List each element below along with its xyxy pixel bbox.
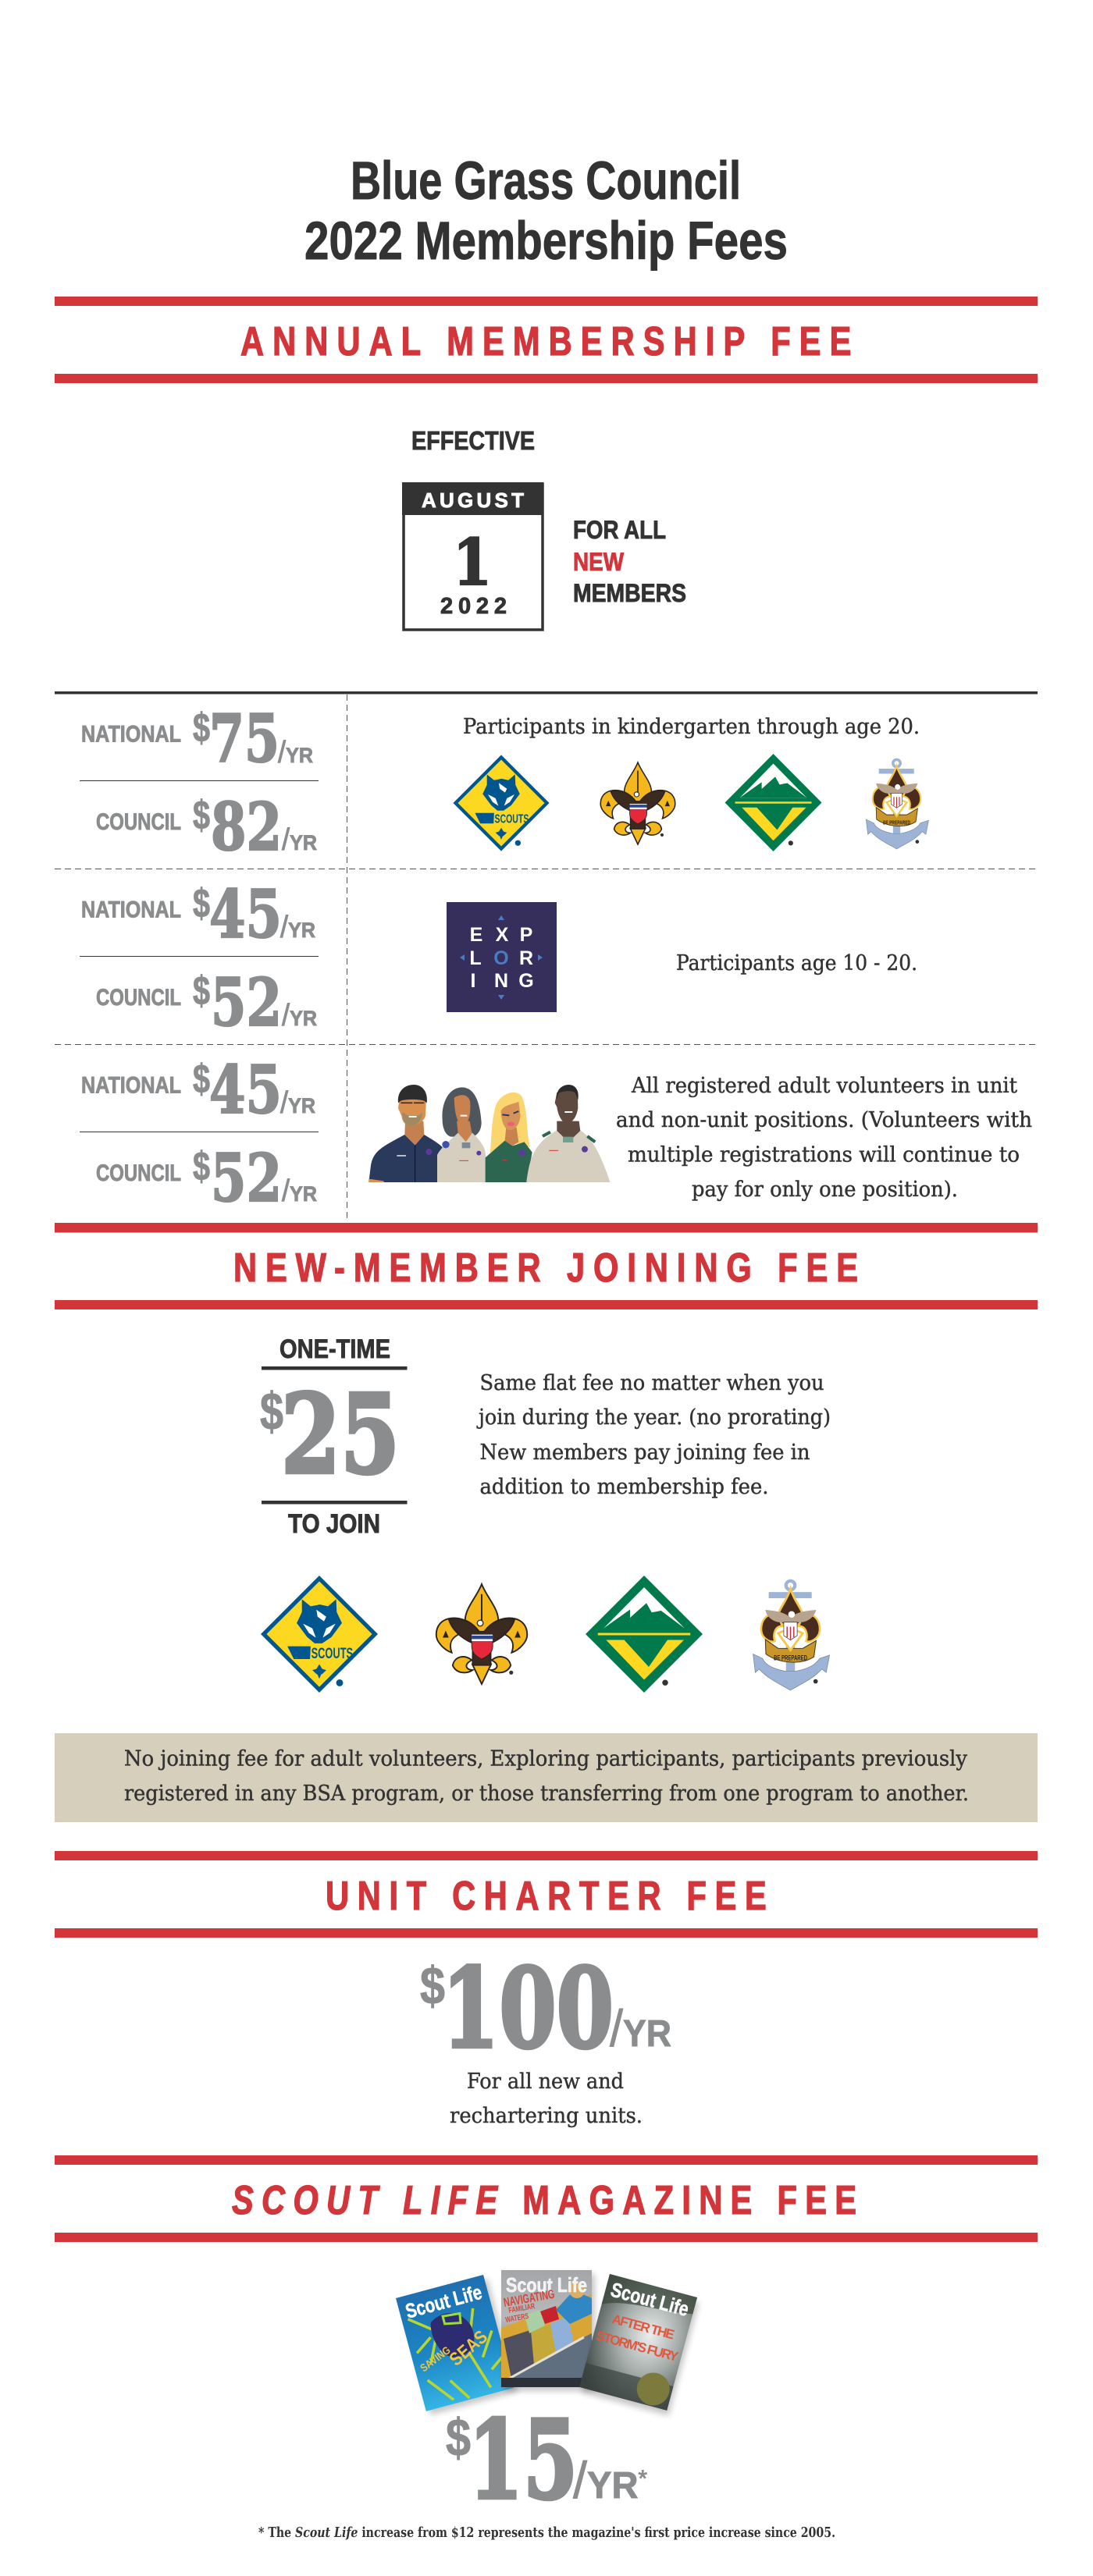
council fee 52: /YR <box>282 1174 317 1208</box>
section header: Scout Life magazine fee: SCOUT LIFE MAGAZINE FEE <box>232 2177 856 2222</box>
icon: Exploring logo: P <box>520 924 532 946</box>
title <box>304 151 788 271</box>
icon: Exploring logo: X <box>496 924 509 946</box>
callout: no joining fee: registered in any BSA program, or those transferring from one program to another. <box>124 1782 969 1806</box>
joining fee description: Same flat fee no matter when you <box>479 1371 824 1395</box>
icon: Exploring logo: O <box>493 947 509 969</box>
icon: Exploring logo: L <box>469 947 482 969</box>
council fee 52: $ <box>193 1144 210 1189</box>
section header: new-member joining fee <box>55 1223 1038 1309</box>
national fee 45: 45 <box>209 1051 282 1128</box>
volunteers text: All registered adult volunteers in unit <box>631 1074 1017 1098</box>
council fee 52: /YR <box>282 999 317 1032</box>
volunteers text: multiple registrations will continue to <box>628 1142 1020 1167</box>
council fee 82: COUNCIL <box>96 809 181 835</box>
icon: Sea Scouts emblem: BE PREPARED <box>883 819 910 826</box>
magazine fee amount: 15 <box>468 2396 578 2524</box>
national fee 45 <box>81 1051 315 1128</box>
for all new members <box>573 516 686 607</box>
icon: Scouts BSA fleur-de-lis large <box>436 1584 527 1684</box>
title: Blue Grass Council <box>351 151 741 211</box>
section header: new-member joining fee: NEW-MEMBER JOINING FEE <box>233 1245 858 1290</box>
council fee 52 <box>96 1139 317 1217</box>
national fee 45: $ <box>193 881 210 926</box>
for all new members: NEW <box>573 548 625 576</box>
council fee 82: 82 <box>211 788 282 865</box>
national fee 45 <box>81 876 315 953</box>
magazine: Saving the Seas <box>396 2274 518 2416</box>
national fee 45: 45 <box>209 876 282 953</box>
icon: Exploring logo: G <box>518 970 534 992</box>
joining fee: one-time $25 to join: ONE-TIME <box>279 1334 390 1364</box>
council fee 52: $ <box>193 968 210 1014</box>
section header: annual membership fee: ANNUAL MEMBERSHIP FEE <box>240 318 851 364</box>
volunteers text <box>616 1074 1032 1202</box>
joining fee description <box>476 1371 831 1499</box>
icon: Venturing badge <box>725 754 821 851</box>
magazine: After the Storm's Fury: Scout Life <box>608 2278 692 2321</box>
calendar: August 1 2022 <box>402 482 543 630</box>
effective label: EFFECTIVE <box>411 426 535 455</box>
council fee 52: 52 <box>211 1139 282 1217</box>
calendar: August 1 2022: 2022 <box>440 594 507 619</box>
section header: Scout Life magazine fee <box>55 2155 1038 2242</box>
footnote: * The Scout Life increase from $12 represents the magazine's first price increase since 2005. <box>258 2524 835 2541</box>
council fee 82: $ <box>193 793 210 838</box>
title: 2022 Membership Fees <box>304 211 788 271</box>
volunteers text: and non-unit positions. (Volunteers with <box>616 1108 1032 1132</box>
joining fee: one-time $25 to join <box>260 1334 408 1539</box>
council fee 52: COUNCIL <box>96 1160 181 1186</box>
magazine: Saving the Seas: Scout Life <box>403 2280 484 2323</box>
national fee 75: 75 <box>209 700 279 777</box>
charter fee amount: /YR <box>610 1999 671 2057</box>
magazine: After the Storm's Fury <box>579 2274 700 2416</box>
national fee 45: NATIONAL <box>81 1072 181 1099</box>
magazine fee amount: $ <box>446 2408 471 2468</box>
participants text: Participants in kindergarten through age 20. <box>463 715 920 739</box>
calendar: August 1 2022: 1 <box>453 526 492 600</box>
for all new members: MEMBERS <box>573 579 686 607</box>
council fee 82 <box>96 788 317 865</box>
calendar: August 1 2022: AUGUST <box>422 489 524 512</box>
magazine: Saving the Seas: SAVING <box>418 2343 453 2374</box>
national fee 75: $ <box>193 705 210 751</box>
national fee 45: /YR <box>280 911 315 944</box>
national fee 45: /YR <box>280 1086 315 1120</box>
fee row: youth participants <box>80 700 928 865</box>
icon: Sea Scouts emblem large: BE PREPARED <box>774 1654 807 1661</box>
icon: Exploring logo: N <box>494 970 508 992</box>
national fee 45: $ <box>193 1057 210 1102</box>
icon: Cub Scouts badge large <box>264 1579 375 1690</box>
charter fee description <box>450 2070 643 2128</box>
section header: unit charter fee <box>55 1851 1038 1938</box>
charter fee amount: 100 <box>442 1945 614 2073</box>
magazine: After the Storm's Fury: AFTER THE <box>611 2311 676 2343</box>
callout: no joining fee <box>55 1733 1038 1822</box>
national fee 75: /YR <box>278 736 313 769</box>
magazine fee amount: /YR <box>573 2451 639 2509</box>
joining fee description: New members pay joining fee in <box>479 1441 810 1465</box>
national fee 75: NATIONAL <box>81 721 181 748</box>
council fee 52: 52 <box>211 964 282 1041</box>
fee row: Exploring <box>80 876 917 1041</box>
exploring text: Participants age 10 - 20. <box>676 951 917 975</box>
magazine: Navigating Familiar Waters: NAVIGATING <box>503 2288 556 2310</box>
joining fee: one-time $25 to join: $ <box>260 1382 283 1441</box>
national fee 75 <box>81 700 313 777</box>
magazine fee amount: * <box>639 2466 647 2492</box>
joining fee: one-time $25 to join: 25 <box>281 1371 400 1499</box>
magazine: Navigating Familiar Waters <box>501 2270 595 2391</box>
icon: Exploring logo <box>447 902 557 1012</box>
magazine: Navigating Familiar Waters: Scout Life <box>506 2273 587 2297</box>
volunteers text: pay for only one position). <box>692 1178 958 1202</box>
joining fee description: addition to membership fee. <box>479 1475 768 1499</box>
icon: Cub Scouts badge large: SCOUTS <box>312 1646 353 1662</box>
council fee 52: COUNCIL <box>96 985 181 1011</box>
icon: Scouts BSA fleur-de-lis <box>600 762 675 844</box>
icon: Cub Scouts badge: SCOUTS <box>494 813 529 826</box>
council fee 82: /YR <box>282 823 317 857</box>
magazine covers <box>396 2270 700 2416</box>
charter fee description: rechartering units. <box>450 2104 643 2128</box>
icon: Cub Scouts badge <box>455 757 547 849</box>
icon: Exploring logo: R <box>519 947 533 969</box>
fee row: adult volunteers <box>80 1051 1032 1217</box>
magazine: Saving the Seas: SEAS <box>446 2326 492 2370</box>
icon: Sea Scouts emblem large <box>753 1581 830 1690</box>
for all new members: FOR ALL <box>573 516 666 544</box>
icon: Sea Scouts emblem <box>866 759 928 849</box>
callout: no joining fee: No joining fee for adult volunteers, Exploring participants, participants previously <box>124 1746 968 1771</box>
joining fee description: join during the year. (no prorating) <box>476 1405 831 1430</box>
icon: Venturing badge large <box>586 1576 703 1693</box>
icon: Exploring logo: E <box>470 924 482 946</box>
section header: annual membership fee <box>55 297 1038 383</box>
section header: unit charter fee: UNIT CHARTER FEE <box>326 1873 767 1918</box>
icon: Exploring logo: I <box>471 970 475 992</box>
illustration: four adult volunteers <box>368 1085 611 1182</box>
charter fee description: For all new and <box>467 2070 624 2094</box>
joining fee: one-time $25 to join: TO JOIN <box>288 1509 380 1539</box>
magazine: After the Storm's Fury: STORM'S FURY <box>595 2329 680 2365</box>
magazine: Navigating Familiar Waters: FAMILIAR <box>508 2302 536 2315</box>
charter fee amount: $ <box>420 1956 445 2016</box>
national fee 45: NATIONAL <box>81 897 181 922</box>
magazine: Navigating Familiar Waters: WATERS <box>505 2312 529 2325</box>
council fee 52 <box>96 964 317 1041</box>
